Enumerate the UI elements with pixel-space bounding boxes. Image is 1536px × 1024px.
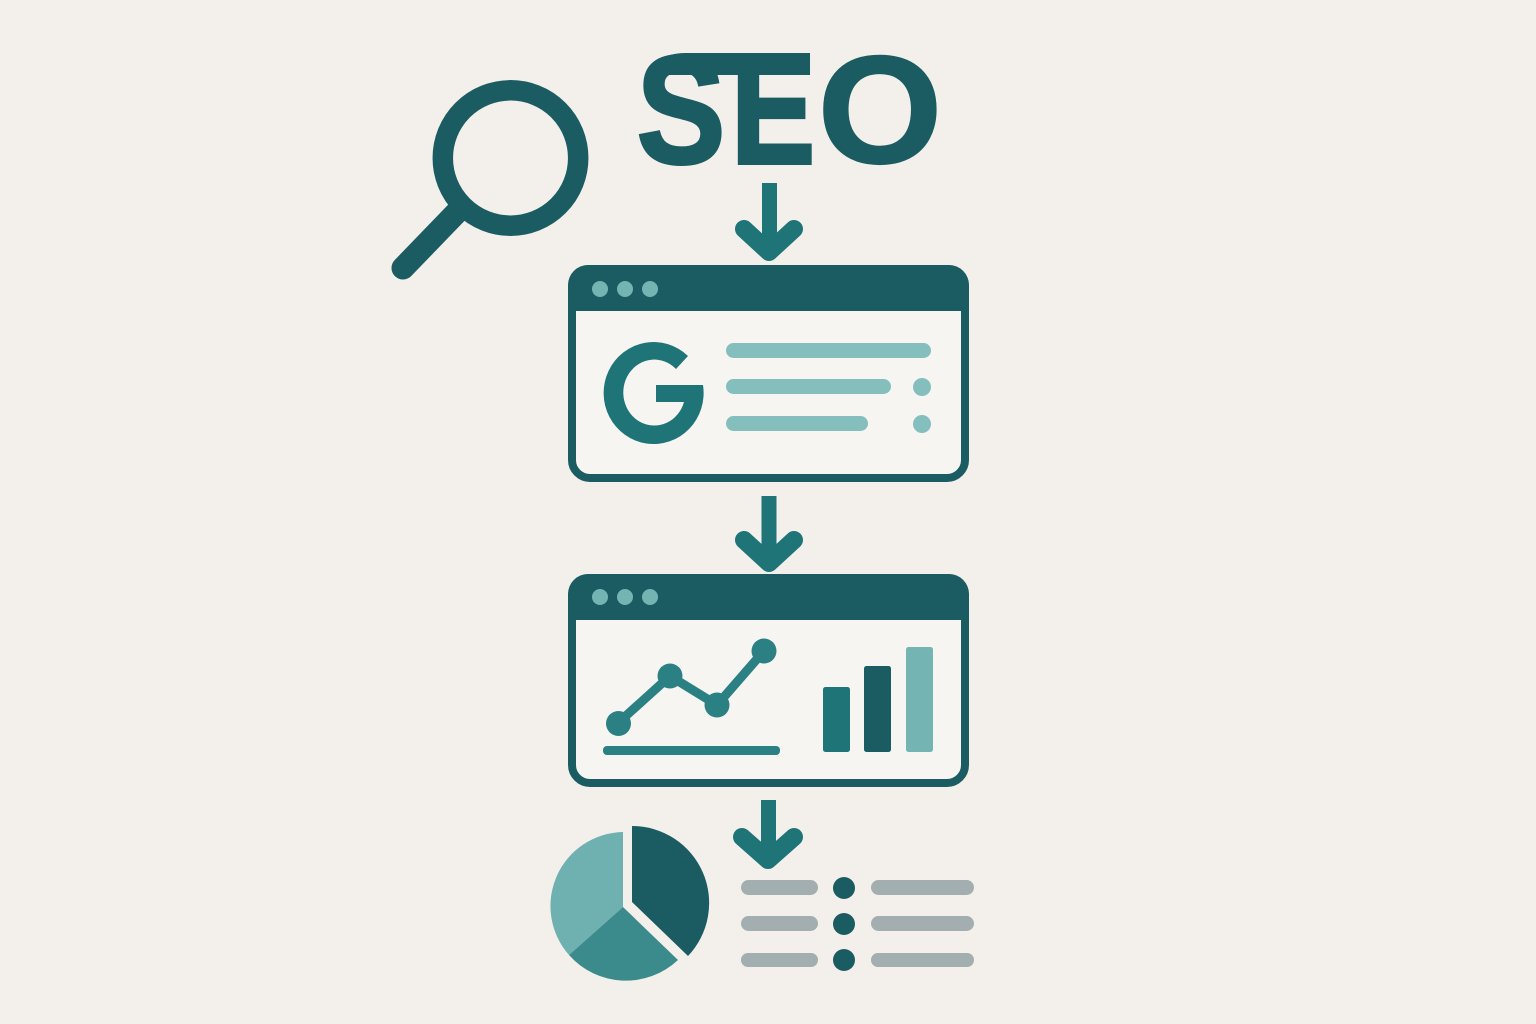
arrow 1 (744, 183, 794, 252)
panel: analytics window (568, 574, 969, 783)
bar chart (823, 647, 933, 752)
search result lines (726, 343, 931, 433)
legend list (741, 877, 974, 971)
icon: magnifying glass (403, 90, 578, 268)
arrow 3 (742, 800, 794, 860)
title: SEO (636, 22, 942, 197)
title: SEO: O (818, 25, 942, 196)
line chart (603, 638, 780, 755)
pie chart (550, 826, 709, 981)
title: SEO: E (731, 22, 815, 197)
panel: search results window (568, 265, 969, 478)
icon: G logo (604, 342, 704, 444)
arrow 2 (744, 496, 794, 563)
title: SEO: S (636, 24, 726, 196)
